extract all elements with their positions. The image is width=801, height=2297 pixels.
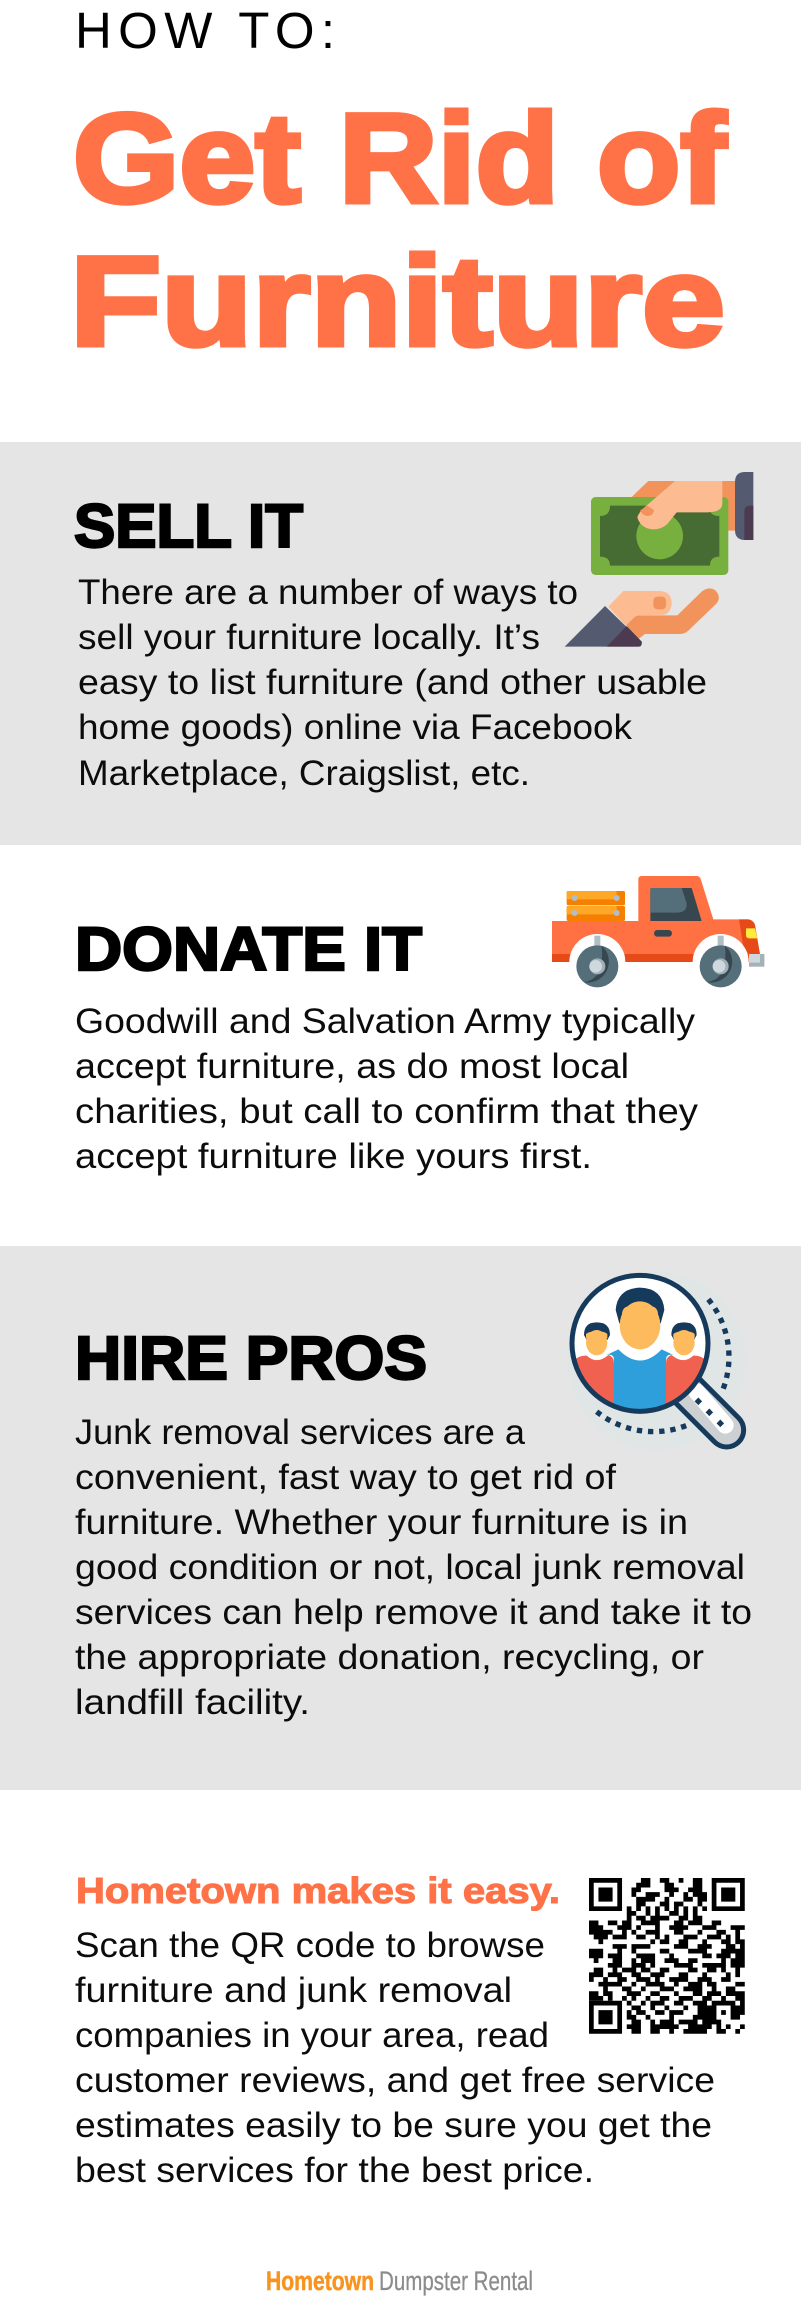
- panel: sell it: [0, 442, 801, 845]
- heading: donate it: DONATE IT: [75, 915, 422, 983]
- title: Get Rid of Furniture: [70, 87, 727, 372]
- heading: hire pros: HIRE PROS: [75, 1324, 427, 1392]
- text: hire pros body: convenient, fast way to get rid of: [75, 1458, 616, 1497]
- text: donate it body: [75, 1002, 699, 1176]
- text: sell it body: easy to list furniture (and other usable: [78, 663, 707, 702]
- title: Get Rid of Furniture: Furniture: [70, 230, 725, 372]
- heading: hometown makes it easy: Hometown makes it easy.: [76, 1870, 560, 1911]
- text: donate it body: accept furniture like yours first.: [75, 1137, 592, 1176]
- heading: sell it: SELL IT: [74, 492, 303, 560]
- footer logo: Hometown Dumpster Rental: Hometown: [266, 2266, 374, 2296]
- text: sell it body: [78, 573, 707, 793]
- footer logo: Hometown Dumpster Rental: Dumpster Rental: [379, 2266, 533, 2296]
- text: sell it body: Marketplace, Craigslist, etc.: [78, 754, 530, 793]
- text: hire pros body: good condition or not, local junk removal: [75, 1548, 745, 1587]
- text: call to action body: customer reviews, and get free service: [75, 2061, 715, 2100]
- text: hire pros body: [75, 1413, 752, 1722]
- text: sell it body: home goods) online via Facebook: [78, 708, 633, 747]
- text: sell it body: There are a number of ways to: [78, 573, 578, 612]
- kicker: HOW TO: HOW TO:: [75, 2, 335, 59]
- text: hire pros body: Junk removal services are a: [75, 1413, 526, 1452]
- text: call to action body: estimates easily to be sure you get the: [75, 2106, 712, 2145]
- title: Get Rid of Furniture: Get Rid of: [73, 87, 727, 229]
- text: sell it body: sell your furniture locally. It’s: [78, 618, 540, 657]
- text: hire pros body: furniture. Whether your furniture is in: [75, 1503, 688, 1542]
- text: call to action body: companies in your area, read: [75, 2016, 549, 2055]
- text: hire pros body: landfill facility.: [75, 1683, 310, 1722]
- text: donate it body: Goodwill and Salvation Army typically: [75, 1002, 696, 1041]
- text: call to action body: best services for the best price.: [75, 2151, 594, 2190]
- text: call to action body: furniture and junk removal: [75, 1971, 512, 2010]
- text: hire pros body: the appropriate donation, recycling, or: [75, 1638, 704, 1677]
- panel: hometown call to action: [75, 1870, 745, 2190]
- text: call to action body: [75, 1926, 715, 2190]
- text: donate it body: accept furniture, as do most local: [75, 1047, 629, 1086]
- icon: pickup truck: [552, 876, 764, 990]
- icon: magnifier over people: [567, 1271, 746, 1450]
- text: donate it body: charities, but call to confirm that they: [75, 1092, 699, 1131]
- panel: hire pros: [0, 1246, 801, 1790]
- icon: money changing hands: [565, 472, 753, 647]
- header: how to title: [70, 2, 727, 372]
- panel: donate it: [75, 876, 764, 1176]
- qr code: [589, 1878, 745, 2034]
- text: hire pros body: services can help remove it and take it to: [75, 1593, 752, 1632]
- text: call to action body: Scan the QR code to browse: [75, 1926, 545, 1965]
- footer logo: Hometown Dumpster Rental: [266, 2266, 533, 2296]
